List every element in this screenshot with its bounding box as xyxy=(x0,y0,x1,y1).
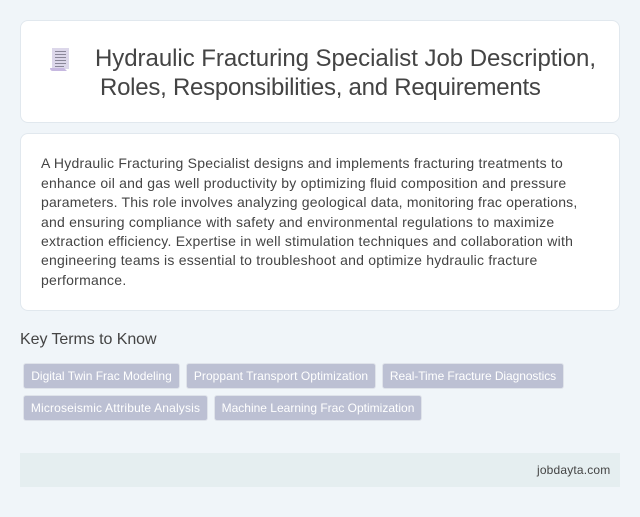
tag xyxy=(214,395,422,421)
description text: A Hydraulic Fracturing Specialist designs and implements fracturing treatments to xyxy=(41,155,563,171)
description text: and ensuring compliance with safety and environmental regulations to maximize xyxy=(41,214,554,230)
heading: key terms: Key Terms to Know xyxy=(20,331,157,348)
tag xyxy=(23,363,180,389)
description text: performance. xyxy=(41,272,126,288)
title xyxy=(95,45,596,101)
description text: enhance oil and gas well productivity by optimizing fluid composition and pressure xyxy=(41,175,566,191)
tag xyxy=(382,363,564,389)
tag xyxy=(186,363,376,389)
tag: Microseismic Attribute Analysis xyxy=(31,401,200,415)
tag: Machine Learning Frac Optimization xyxy=(222,401,414,415)
title: Roles, Responsibilities, and Requirements xyxy=(100,74,541,101)
description text: engineering teams is essential to troubleshoot and optimize hydraulic fracture xyxy=(41,252,538,268)
description text: extraction efficiency. Expertise in well stimulation techniques and collaboration with xyxy=(41,233,573,249)
tag: Proppant Transport Optimization xyxy=(194,369,368,383)
footer text: jobdayta.com xyxy=(537,463,610,477)
footer bar xyxy=(20,453,620,487)
description panel xyxy=(20,133,620,311)
icon: document xyxy=(50,48,69,71)
description text: parameters. This role involves analyzing geological data, monitoring frac operations, xyxy=(41,194,577,210)
header panel xyxy=(20,20,620,123)
title: Hydraulic Fracturing Specialist Job Description, xyxy=(95,45,596,72)
tag: Real-Time Fracture Diagnostics xyxy=(390,369,556,383)
description text xyxy=(41,155,577,288)
tag: Digital Twin Frac Modeling xyxy=(31,369,172,383)
tag xyxy=(23,395,208,421)
